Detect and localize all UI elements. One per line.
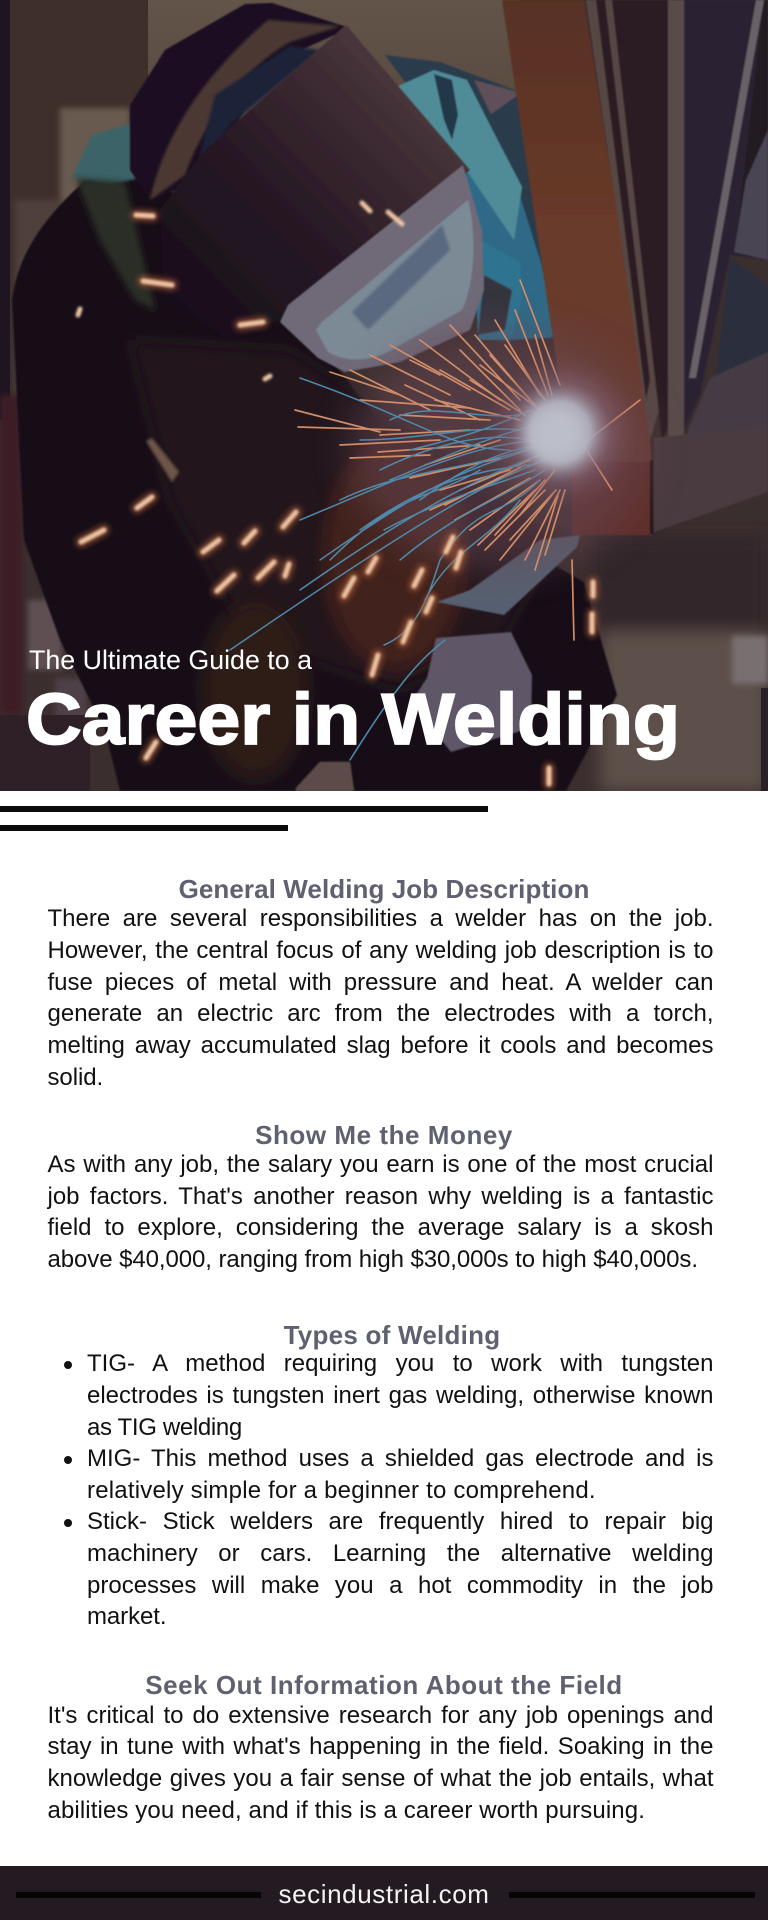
sparks: bright arc <box>482 354 638 510</box>
heading: types of welding: Types of Welding <box>284 1320 500 1350</box>
text block: salary: field to explore, considering the average salary is a skosh <box>48 1214 714 1241</box>
sparks: blue filaments <box>230 378 545 760</box>
text block: job description: However, the central focus of any welding job description is to <box>48 937 714 964</box>
list text: machinery or cars. Learning the alternative welding <box>87 1540 714 1567</box>
text block: job description: fuse pieces of metal with pressure and heat. A welder can <box>48 969 714 996</box>
list text <box>87 1350 714 1630</box>
list text: as TIG welding <box>87 1414 242 1440</box>
heading: seek out information: Seek Out Information About the Field <box>145 1670 623 1700</box>
footer website: secindustrial.com <box>278 1879 490 1909</box>
list text: Stick- Stick welders are frequently hired to repair big <box>87 1508 714 1535</box>
text block: research: abilities you need, and if this is a career worth pursuing. <box>48 1797 645 1824</box>
text block: research: stay in tune with what's happening in the field. Soaking in the <box>48 1733 714 1760</box>
sparks: haze <box>350 330 650 570</box>
decorative double rule <box>0 806 488 831</box>
text block: salary: above $40,000, ranging from high $30,000s to high $40,000s. <box>48 1246 698 1273</box>
list text: MIG- This method uses a shielded gas electrode and is <box>87 1445 714 1472</box>
worker body <box>12 124 617 791</box>
footer rule right <box>509 1892 755 1898</box>
sparks: orange rays <box>295 280 640 640</box>
bullet: Stick <box>64 1519 72 1527</box>
subtitle: The Ultimate Guide to a <box>29 645 312 675</box>
list text: relatively simple for a beginner to comprehend. <box>87 1477 596 1504</box>
list text: processes will make you a hot commodity in the job <box>87 1572 714 1599</box>
hero photo: welder with sparks <box>0 0 768 791</box>
list text: market. <box>87 1603 166 1630</box>
text block: job description: solid. <box>48 1064 103 1091</box>
text block: job description: generate an electric arc from the electrodes with a torch, <box>48 1000 714 1027</box>
sparks: flying embers <box>78 203 593 784</box>
text block: salary: As with any job, the salary you earn is one of the most crucial <box>48 1151 714 1178</box>
bulleted list: welding types <box>64 1350 714 1630</box>
title: Career in Welding <box>26 680 680 760</box>
footer rule left <box>16 1892 261 1898</box>
text block: research <box>48 1702 714 1824</box>
helmet visor <box>280 165 484 372</box>
welding helmet <box>130 3 470 340</box>
blue jacket <box>385 55 566 342</box>
heading: show me the money: Show Me the Money <box>255 1120 513 1150</box>
list text: TIG- A method requiring you to work with tungsten <box>87 1350 714 1377</box>
photo background <box>0 0 768 791</box>
text block: salary <box>46 1151 714 1273</box>
text block: research: knowledge gives you a fair sense of what the job entails, what <box>48 1765 714 1792</box>
bullet: TIG <box>64 1361 72 1369</box>
steel beam and frame <box>502 0 768 535</box>
list text: electrodes is tungsten inert gas welding, otherwise known <box>87 1382 714 1409</box>
heading: general welding job description: General Welding Job Description <box>179 874 589 904</box>
text block: job description: melting away accumulated slag before it cools and becomes <box>48 1032 714 1059</box>
text block: salary: job factors. That's another reason why welding is a fantastic <box>48 1183 714 1210</box>
text block: job description <box>48 905 714 1091</box>
footer band <box>0 1866 768 1920</box>
gloves <box>411 535 580 752</box>
bullet: MIG <box>64 1456 72 1464</box>
text block: research: It's critical to do extensive research for any job openings and <box>48 1702 714 1729</box>
text block: job description: There are several responsibilities a welder has on the job. <box>48 905 714 932</box>
